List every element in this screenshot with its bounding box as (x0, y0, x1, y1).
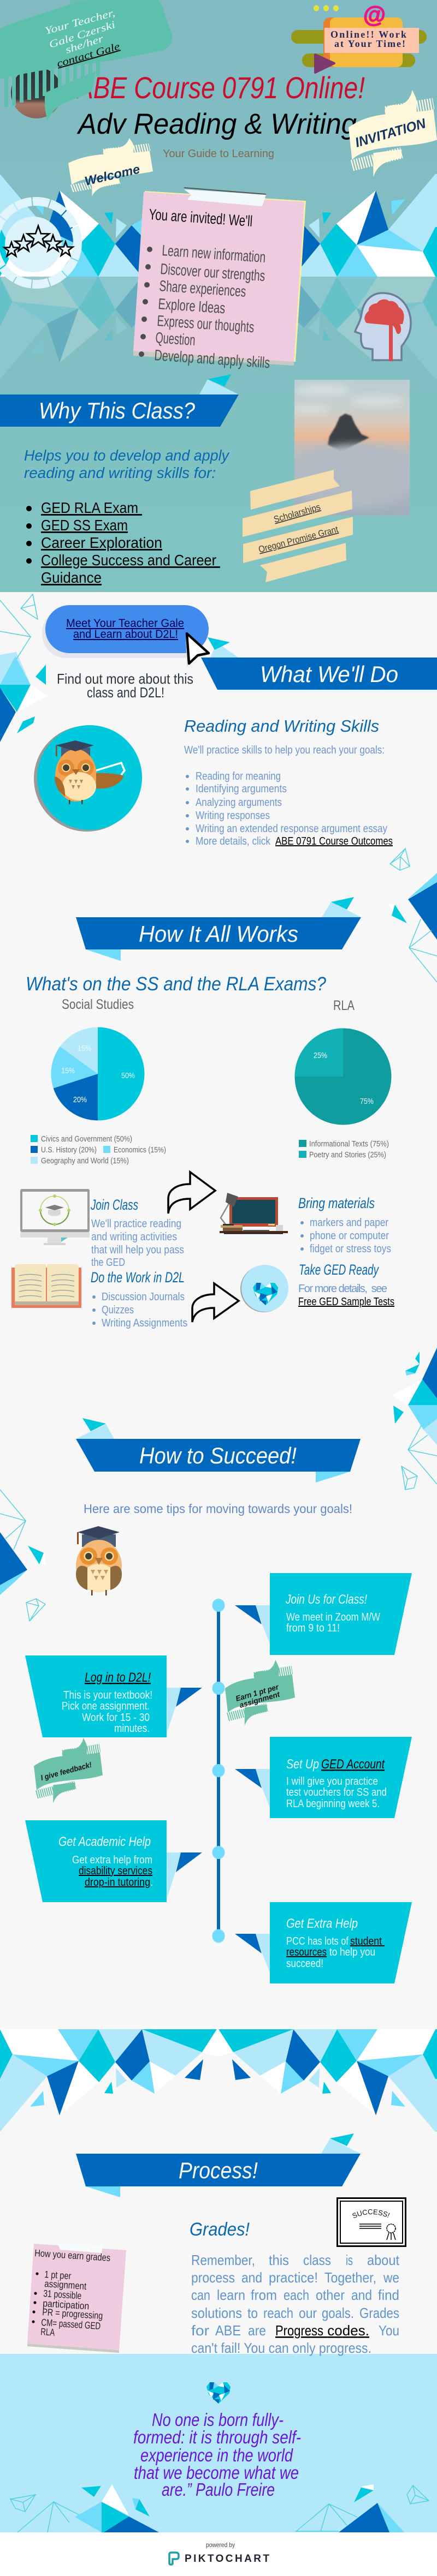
pie labels: 15% (78, 1044, 91, 1053)
legend: U.S. History (20%) (41, 1145, 97, 1155)
title: ABE Course 0791 Online! (75, 70, 365, 105)
ribbon band (0, 0, 172, 79)
note heading: You are invited! We'll (149, 206, 253, 230)
icon: heart circle (240, 1265, 288, 1312)
pronouns: she/her (64, 33, 105, 56)
paragraph: grades: practice! (269, 2269, 318, 2286)
paragraph: grades: can (191, 2287, 210, 2303)
text: do the work: Writing Assignments (102, 1317, 187, 1329)
text: take ged ready: Free GED Sample Tests (298, 1296, 394, 1308)
paragraph: grades: codes. (323, 2322, 369, 2339)
card body: to help you (329, 1946, 375, 1958)
card heading: Get Academic Help (58, 1834, 151, 1849)
card heading: Set Up (286, 1757, 319, 1772)
paragraph: grades: are (248, 2322, 266, 2339)
icon: brain head (355, 293, 411, 361)
note items: Discover our strengths (160, 260, 265, 284)
geometric mountain pattern (0, 174, 437, 277)
paragraph: grades: You (379, 2322, 399, 2339)
tips intro: Here are some tips for moving towards your goals! (84, 1502, 352, 1516)
paragraph: grades: is (346, 2252, 353, 2268)
note shadow (27, 2344, 119, 2353)
tape (57, 2243, 103, 2253)
photo: mountain in clouds (294, 380, 410, 516)
banner: what we'll do (201, 637, 437, 692)
card body: We meet in Zoom M/W (286, 1611, 380, 1623)
geometric pattern reflection (0, 277, 437, 379)
icon: success certificate (336, 2197, 406, 2247)
icon: heart (206, 2382, 231, 2404)
ribbon: feedback (34, 1738, 103, 1803)
paragraph: grades: ABE (215, 2322, 241, 2339)
text: take ged ready: Take GED Ready (299, 1262, 379, 1278)
background: light page section (0, 592, 437, 2354)
note bullets (139, 247, 152, 357)
card body: I will give you practice (286, 1776, 378, 1788)
card body (62, 1689, 152, 1735)
welcome text: Welcome (83, 162, 141, 188)
arrow: to ged ready (192, 1283, 239, 1322)
at sign: @ (363, 2, 386, 27)
icon: chalkboard desk (220, 1193, 288, 1234)
pie slices (295, 1028, 391, 1125)
intro: We'll practice skills to help you reach your goals: (184, 744, 385, 756)
quote: formed: it is through self- (133, 2427, 301, 2447)
chart: rla pie (295, 998, 391, 1160)
list: exams and goals (26, 499, 220, 586)
note items: Develop and apply skills (154, 346, 270, 371)
heading: what's on the exams: What's on the SS and the RLA Exams? (26, 973, 326, 995)
card body: PCC has lots of (286, 1935, 349, 1947)
stars (4, 226, 73, 256)
timeline (212, 1599, 225, 1943)
paragraph: grades: process (191, 2269, 235, 2286)
note text: assignment (44, 2278, 87, 2292)
paragraph: grades: and (351, 2287, 372, 2303)
card body: Get extra help from (72, 1854, 152, 1866)
text: take ged ready: For more details, see (298, 1283, 387, 1295)
text: do the work (91, 1269, 187, 1329)
text: do the work: Discussion Journals (102, 1291, 185, 1303)
card body (286, 1935, 385, 1970)
pie slices (51, 1027, 144, 1121)
owl (55, 740, 124, 804)
text: do the work: Do the Work in D2L (91, 1269, 185, 1286)
note text: RLA (40, 2326, 55, 2338)
outline gem (390, 848, 410, 870)
paragraph: grades: to (247, 2305, 258, 2321)
piktochart logo (169, 2553, 179, 2565)
online callout graphic (291, 2, 427, 73)
paragraph: grades: find (378, 2287, 399, 2303)
banner: why this class (0, 374, 239, 427)
note text: 1 pt per (44, 2269, 72, 2281)
card body: disability services (79, 1865, 152, 1877)
note text: 31 possible (43, 2288, 82, 2302)
legend: Civics and Government (50%) (41, 1134, 132, 1144)
teacher photo (11, 67, 62, 118)
teacher name: Your Teacher, (44, 7, 116, 37)
paragraph: grades: solutions (191, 2305, 242, 2321)
skills list: ABE 0791 Course Outcomes (275, 835, 393, 847)
orange block (323, 17, 403, 67)
skills list: Analyzing arguments (196, 797, 282, 809)
note items: Explore Ideas (158, 295, 226, 316)
list: exams and goals: College Success and Career (41, 552, 220, 569)
text: bring materials: fidget or stress toys (310, 1243, 391, 1255)
note text: PR = progressing (42, 2306, 103, 2321)
banner text: How It All Works (139, 921, 298, 947)
icon: open book (11, 1264, 81, 1308)
certificate lines (359, 2224, 381, 2228)
chart title: Social Studies (62, 997, 134, 1012)
text: bring materials: markers and paper (310, 1217, 388, 1229)
list: exams and goals: GED SS Exam (41, 517, 128, 534)
text: join class (90, 1197, 184, 1269)
note items: Question (155, 329, 196, 349)
card body: This is your textbook! (63, 1689, 152, 1701)
brain (364, 300, 404, 361)
section: reading and writing skills (184, 716, 393, 847)
invitation text: INVITATION (353, 116, 428, 151)
text: join class: that will help you pass (91, 1244, 184, 1256)
card body (72, 1854, 153, 1888)
sticky note: how you earn grades (27, 2243, 126, 2353)
background: pale blue band (0, 2354, 437, 2532)
chart title: RLA (333, 998, 355, 1013)
heading: grades: Grades! (190, 2219, 250, 2240)
legend: Economics (15%) (114, 1145, 166, 1155)
arrow: to materials (168, 1172, 215, 1214)
card body: . (150, 1876, 153, 1888)
card: get extra help (235, 1902, 412, 1983)
card heading: GED Account (321, 1757, 385, 1772)
callout line 2: at Your Time! (334, 38, 405, 49)
tagline: Your Guide to Learning (163, 148, 274, 160)
card: set up ged account (235, 1737, 412, 1818)
card body: resources (286, 1946, 327, 1958)
quote (133, 2410, 301, 2500)
note edge (134, 191, 306, 362)
grant link: Oregon Promise Grant (257, 524, 339, 555)
skills list: More details, click (196, 835, 271, 847)
icon: monitor (20, 1189, 90, 1245)
card body: Work for 15 - 30 (82, 1712, 150, 1724)
paragraph: grades: from (251, 2287, 277, 2303)
list: exams and goals: Guidance (41, 569, 102, 586)
card body: minutes. (114, 1723, 150, 1735)
note text: How you earn grades (34, 2248, 111, 2263)
olive bars (291, 30, 427, 67)
ribbon flag (45, 71, 96, 122)
skills list: Writing responses (196, 810, 270, 822)
skills list: Writing an extended response argument essay (196, 823, 387, 835)
find out more text (57, 671, 193, 701)
find out more text: class and D2L! (87, 684, 164, 701)
paragraph: grades: can't fail! You can only progress. (191, 2340, 371, 2356)
note text (32, 2248, 111, 2338)
contact link: contact Gale (56, 41, 121, 70)
card body: RLA beginning week 5. (286, 1798, 380, 1810)
card body: student (350, 1935, 385, 1947)
background: top teal section (0, 0, 437, 592)
scholarship banner (243, 470, 353, 582)
paragraph: grades: and (241, 2269, 262, 2286)
teacher name line 2: Gale Czerski (48, 19, 117, 51)
owl (76, 1526, 122, 1595)
note items (154, 242, 270, 371)
card: get academic help (25, 1820, 202, 1902)
teacher button: and Learn about D2L! (73, 628, 178, 641)
legend: Geography and World (15%) (41, 1156, 129, 1166)
text: join class: We'll practice reading (91, 1218, 181, 1230)
tape (184, 189, 266, 206)
card body: test vouchers for SS and (286, 1786, 387, 1798)
pie labels (61, 1044, 135, 1104)
text: bring materials: Bring materials (298, 1195, 375, 1211)
banner text: How to Succeed! (139, 1443, 297, 1468)
paragraph: grades: for (191, 2322, 209, 2339)
pie labels: 50% (121, 1071, 135, 1080)
note items: Learn new information (162, 242, 266, 266)
banner text: What We'll Do (260, 661, 398, 687)
invitation ribbon (349, 90, 437, 177)
seal (387, 2224, 395, 2233)
paragraph: grades: Progress (275, 2322, 323, 2339)
button text: Meet Your Teacher Gale (66, 617, 184, 630)
ribbon text: I give feedback! (40, 1760, 93, 1782)
paragraph: grades: goals. (322, 2305, 354, 2321)
skills list: Reading for meaning (196, 770, 281, 782)
paragraph: grades: other (316, 2287, 345, 2303)
ribbon stripes (4, 0, 104, 107)
legend: Poetry and Stories (25%) (309, 1150, 386, 1160)
sticky note: invitation list (133, 188, 306, 371)
subtitle: Adv Reading & Writing (76, 108, 357, 140)
paragraph: grades: Grades (359, 2305, 399, 2321)
card body: from 9 to 11! (286, 1622, 340, 1634)
legend: Informational Texts (75%) (309, 1139, 389, 1149)
paragraph: grades: class (303, 2252, 331, 2268)
chart: social studies pie (31, 997, 166, 1166)
quote: that we become what we (134, 2463, 299, 2483)
teacher button (42, 605, 209, 658)
pie label: 25% (314, 1051, 327, 1060)
note items: Express our thoughts (157, 312, 255, 336)
badge ring (0, 201, 78, 284)
paragraph: grades: our (299, 2305, 317, 2321)
paragraph: grades: about (367, 2252, 400, 2268)
welcome ribbon (68, 138, 153, 196)
ribbon: earn points (225, 1660, 295, 1726)
paragraph: grades: reach (263, 2305, 293, 2321)
powered by: powered by (206, 2541, 235, 2549)
card heading (286, 1757, 385, 1772)
paragraph: grades: we (383, 2269, 399, 2286)
card body (286, 1776, 387, 1810)
card body: succeed! (286, 1958, 323, 1970)
background: footer (0, 2532, 437, 2576)
note text: participation (43, 2298, 90, 2311)
legend (299, 1139, 389, 1160)
left corner decoration (0, 594, 48, 742)
banner: how it all works (76, 897, 361, 961)
left corner decoration (0, 1490, 46, 1621)
paragraph: grades: learn (217, 2287, 245, 2303)
card body: drop-in tutoring (85, 1876, 150, 1888)
list: exams and goals: Career Exploration (41, 534, 162, 551)
ribbon: earn points: assignment (238, 1689, 281, 1710)
paragraph: grades: this (269, 2252, 289, 2268)
heading: Reading and Writing Skills (184, 716, 379, 736)
callout line 1: Online!! Work (330, 29, 406, 40)
card body: Pick one assignment. (62, 1700, 150, 1712)
card: log in to d2l (25, 1655, 202, 1737)
quote: experience in the world (140, 2445, 293, 2465)
dots (314, 5, 339, 11)
banner: process (76, 2133, 361, 2197)
text: take ged ready (298, 1262, 394, 1308)
pie labels: 15% (61, 1066, 75, 1075)
legend (31, 1134, 166, 1166)
text: bring materials: phone or computer (310, 1230, 389, 1242)
owl in circle (34, 725, 142, 832)
skills list: Identifying arguments (196, 783, 287, 795)
card heading: Log in to D2L! (85, 1670, 151, 1685)
play triangle (315, 55, 334, 73)
peach label (324, 28, 419, 53)
geometric pattern divider (0, 2029, 437, 2132)
ribbon text: Earn 1 pt per (234, 1682, 280, 1703)
diploma (96, 763, 125, 775)
right corner decoration (389, 873, 437, 982)
quote: are.” Paulo Freire (162, 2479, 275, 2500)
banner text: Why This Class? (39, 398, 196, 423)
note items: Share experiences (159, 277, 246, 300)
text: join class: and writing activities (91, 1231, 177, 1243)
icon: cursor (186, 633, 209, 667)
bottom left mountains (10, 2484, 159, 2532)
scholarship link: Scholarships (273, 501, 322, 525)
text: do the work: Quizzes (102, 1304, 134, 1316)
wordmark: PIKTOCHART (185, 2553, 269, 2565)
note paper (133, 192, 304, 362)
note text: CM= passed GED (41, 2317, 101, 2332)
paragraph: grades (191, 2252, 400, 2356)
certificate text: SUCCESS! (352, 2209, 390, 2218)
paragraph: grades: Together, (324, 2269, 376, 2286)
stars badge (0, 201, 78, 284)
right corner decoration 2 (392, 1348, 437, 1490)
list: exams and goals: GED RLA Exam (41, 499, 142, 516)
pie labels: 20% (73, 1095, 87, 1104)
text: bring materials (298, 1195, 391, 1255)
footer credit (169, 2541, 269, 2565)
card body (286, 1611, 380, 1634)
card: join us for class (235, 1573, 412, 1655)
banner: how to succeed (76, 1418, 361, 1483)
text: join class: the GED (91, 1257, 125, 1269)
subheading: helps you: reading and writing skills for: (24, 464, 216, 481)
subheading: helps you: Helps you to develop and apply (24, 447, 230, 464)
skills list (186, 770, 393, 847)
paragraph: grades: each (284, 2287, 309, 2303)
card heading: Get Extra Help (286, 1916, 358, 1931)
card heading: Join Us for Class! (285, 1592, 367, 1607)
timeline nodes (212, 1599, 225, 1943)
note paper (27, 2244, 126, 2350)
teacher ribbon with photo (0, 0, 172, 122)
badge center (5, 217, 62, 272)
text: join class: Join Class (90, 1197, 138, 1213)
paragraph: grades: Remember, (191, 2252, 255, 2268)
quote: No one is born fully- (152, 2410, 284, 2430)
banner text: Process! (179, 2157, 258, 2183)
note shadow (133, 351, 294, 366)
bottom right mountains (296, 2484, 429, 2532)
subheading: helps you (24, 447, 230, 481)
find out more text: Find out more about this (57, 671, 193, 687)
pie label: 75% (360, 1097, 374, 1106)
